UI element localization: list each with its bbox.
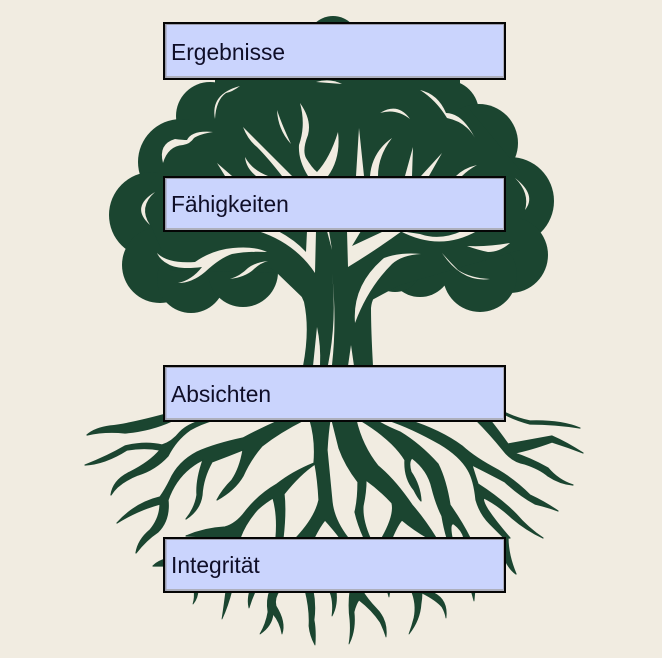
- label box: Integrität: Integrität: [171, 552, 260, 578]
- label box: Fähigkeiten: [163, 176, 506, 232]
- label box: Fähigkeiten: Fähigkeiten: [171, 191, 289, 217]
- label box: Integrität: [163, 537, 506, 593]
- label box: Absichten: Absichten: [171, 381, 271, 407]
- roots above the lower box: [85, 412, 583, 574]
- label box: Ergebnisse: Ergebnisse: [171, 39, 285, 65]
- trunk: [270, 240, 382, 366]
- canopy and trunk cut-outs: [141, 80, 529, 366]
- canopy: [109, 16, 554, 313]
- label box: Absichten: [163, 365, 506, 422]
- roots below the lower box: [193, 590, 475, 645]
- label box: Ergebnisse: [163, 22, 506, 80]
